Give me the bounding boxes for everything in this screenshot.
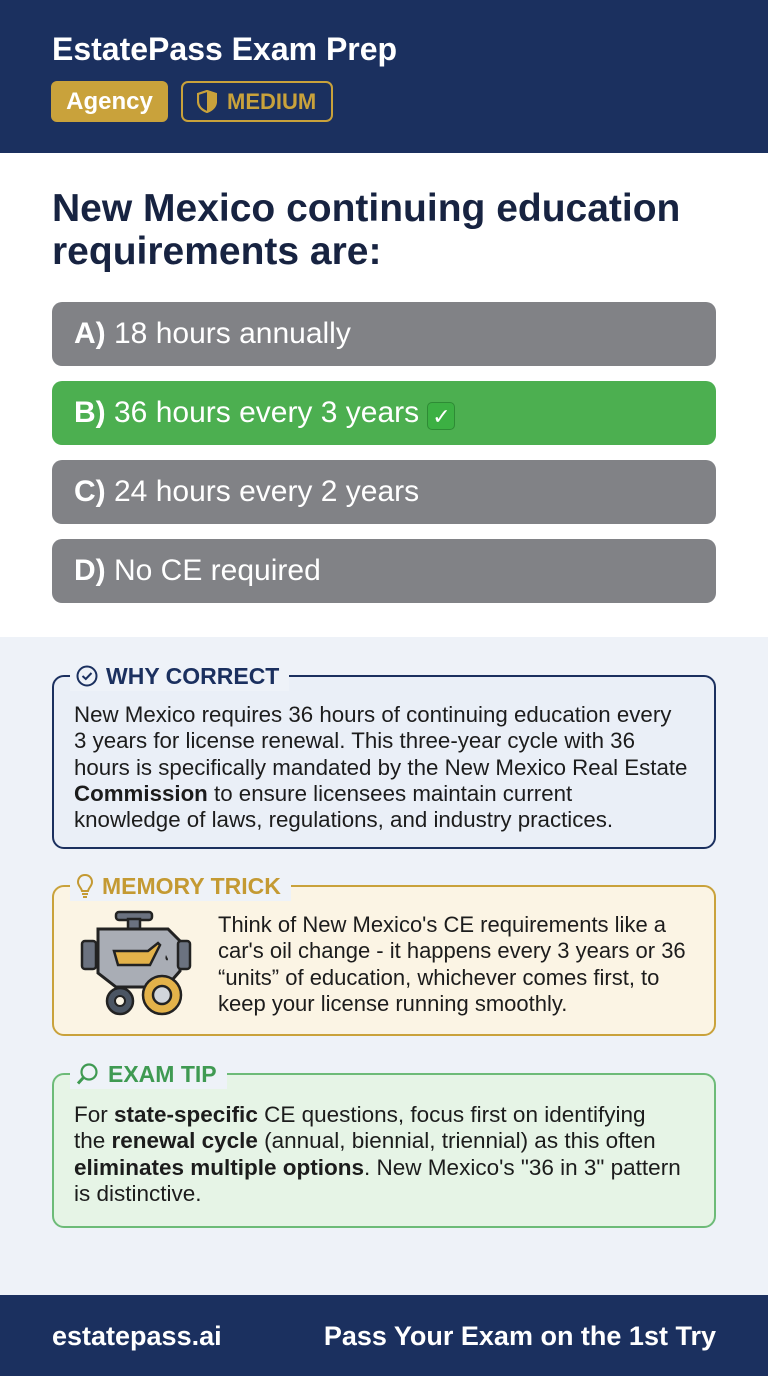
panel: memory trick bbox=[52, 885, 716, 1036]
title: EstatePass Exam Prep bbox=[52, 31, 397, 67]
badge: medium bbox=[181, 81, 333, 122]
question area bbox=[0, 153, 768, 637]
badge: agency bbox=[51, 81, 168, 122]
text: why correct: knowledge of laws, regulations, and industry practices. bbox=[74, 807, 613, 832]
text: why correct: 3 years for license renewal. This three-year cycle with 36 bbox=[74, 728, 635, 753]
text: why correct: Commission to ensure licensees maintain current bbox=[74, 781, 572, 806]
badge: agency: Agency bbox=[66, 88, 153, 115]
text: exam tip: is distinctive. bbox=[74, 1181, 202, 1206]
panel: why correct bbox=[52, 675, 716, 849]
option D: D) No CE required bbox=[74, 554, 321, 587]
text: why correct: New Mexico requires 36 hours of continuing education every bbox=[74, 702, 671, 727]
option C bbox=[52, 460, 716, 524]
text: exam tip bbox=[74, 1102, 681, 1206]
heading: exam tip: EXAM TIP bbox=[108, 1061, 217, 1087]
heading: why correct bbox=[70, 661, 289, 691]
question: requirements are: bbox=[52, 230, 381, 273]
text: why correct: hours is specifically mandated by the New Mexico Real Estate bbox=[74, 755, 687, 780]
text: exam tip: the renewal cycle (annual, biennial, triennial) as this often bbox=[74, 1128, 656, 1153]
text: memory trick: car's oil change - it happens every 3 years or 36 bbox=[218, 938, 686, 963]
text: memory trick: “units” of education, whichever comes first, to bbox=[218, 965, 659, 990]
icon: shield bbox=[197, 90, 217, 113]
heading: exam tip bbox=[70, 1059, 227, 1089]
question: New Mexico continuing education bbox=[52, 187, 680, 230]
badge: medium: MEDIUM bbox=[227, 89, 316, 114]
heading: memory trick: MEMORY TRICK bbox=[102, 873, 281, 899]
text: memory trick: keep your license running smoothly. bbox=[218, 991, 567, 1016]
text: memory trick bbox=[218, 912, 686, 1016]
text: why correct bbox=[74, 702, 687, 832]
heading: why correct: WHY CORRECT bbox=[106, 663, 279, 689]
option A: A) 18 hours annually bbox=[74, 317, 351, 350]
text: exam tip: For state-specific CE questions, focus first on identifying bbox=[74, 1102, 646, 1127]
text: exam tip: eliminates multiple options. New Mexico's "36 in 3" pattern bbox=[74, 1155, 681, 1180]
text: memory trick: Think of New Mexico's CE requirements like a bbox=[218, 912, 666, 937]
option D bbox=[52, 539, 716, 603]
option A bbox=[52, 302, 716, 366]
question bbox=[52, 187, 680, 273]
option B correct: B) 36 hours every 3 years bbox=[74, 396, 419, 429]
footer: site: estatepass.ai bbox=[52, 1321, 222, 1351]
panel: exam tip bbox=[52, 1073, 716, 1228]
footer bbox=[0, 1295, 768, 1376]
icon: engine with oil can and gears bbox=[80, 910, 192, 1016]
option B correct: ✓ bbox=[432, 404, 451, 429]
header bbox=[0, 0, 768, 153]
option C: C) 24 hours every 2 years bbox=[74, 475, 419, 508]
footer: slogan: Pass Your Exam on the 1st Try bbox=[324, 1321, 716, 1351]
option B correct bbox=[52, 381, 716, 445]
